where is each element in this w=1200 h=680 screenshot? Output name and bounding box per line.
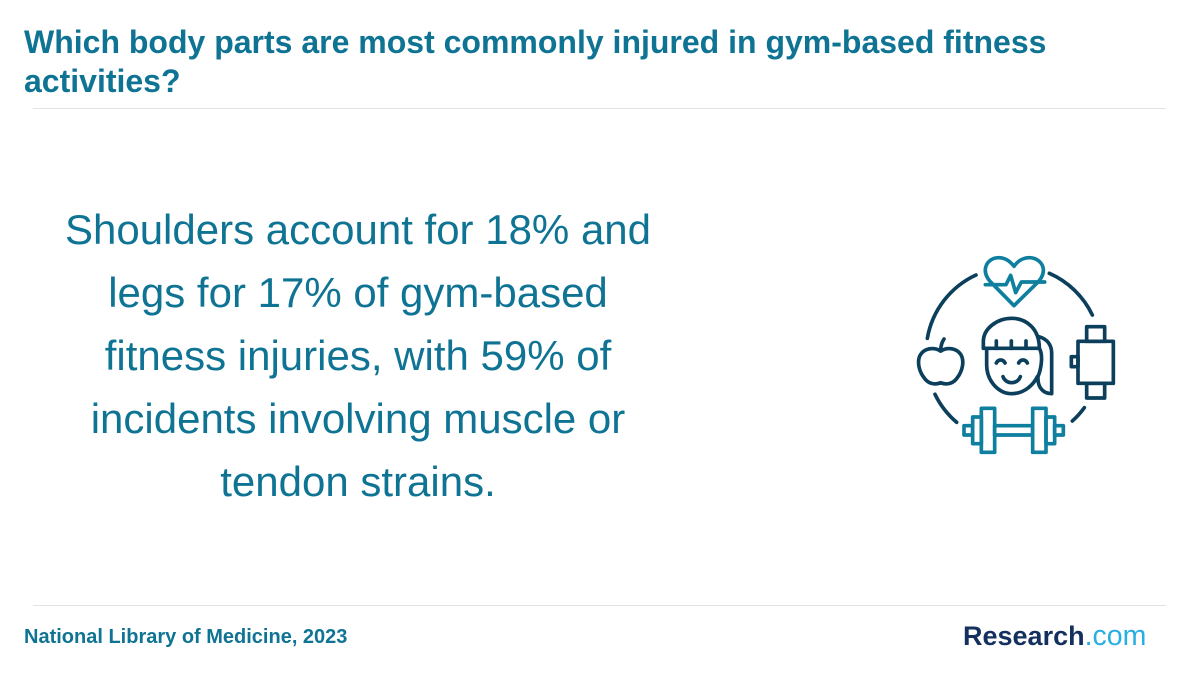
title: activities? xyxy=(24,63,181,99)
icon: heart with pulse xyxy=(985,258,1045,306)
title xyxy=(24,24,1046,99)
icon: ring arcs xyxy=(927,273,1092,422)
main statement: incidents involving muscle or xyxy=(91,395,625,442)
main statement xyxy=(65,206,651,505)
icon: face with ponytail xyxy=(983,318,1052,394)
icon: apple xyxy=(919,339,963,384)
icon: fitness circle xyxy=(916,256,1116,454)
main statement: tendon strains. xyxy=(220,458,496,505)
logo: Research.com: Research.com xyxy=(963,620,1146,652)
main statement: legs for 17% of gym-based xyxy=(108,269,608,316)
main statement: Shoulders account for 18% and xyxy=(65,206,651,253)
main statement: fitness injuries, with 59% of xyxy=(105,332,611,379)
source note: National Library of Medicine, 2023 xyxy=(24,626,347,648)
icon: dumbbell xyxy=(964,408,1063,452)
icon: smartwatch xyxy=(1071,327,1113,398)
title: Which body parts are most commonly injured in gym-based fitness xyxy=(24,24,1046,60)
